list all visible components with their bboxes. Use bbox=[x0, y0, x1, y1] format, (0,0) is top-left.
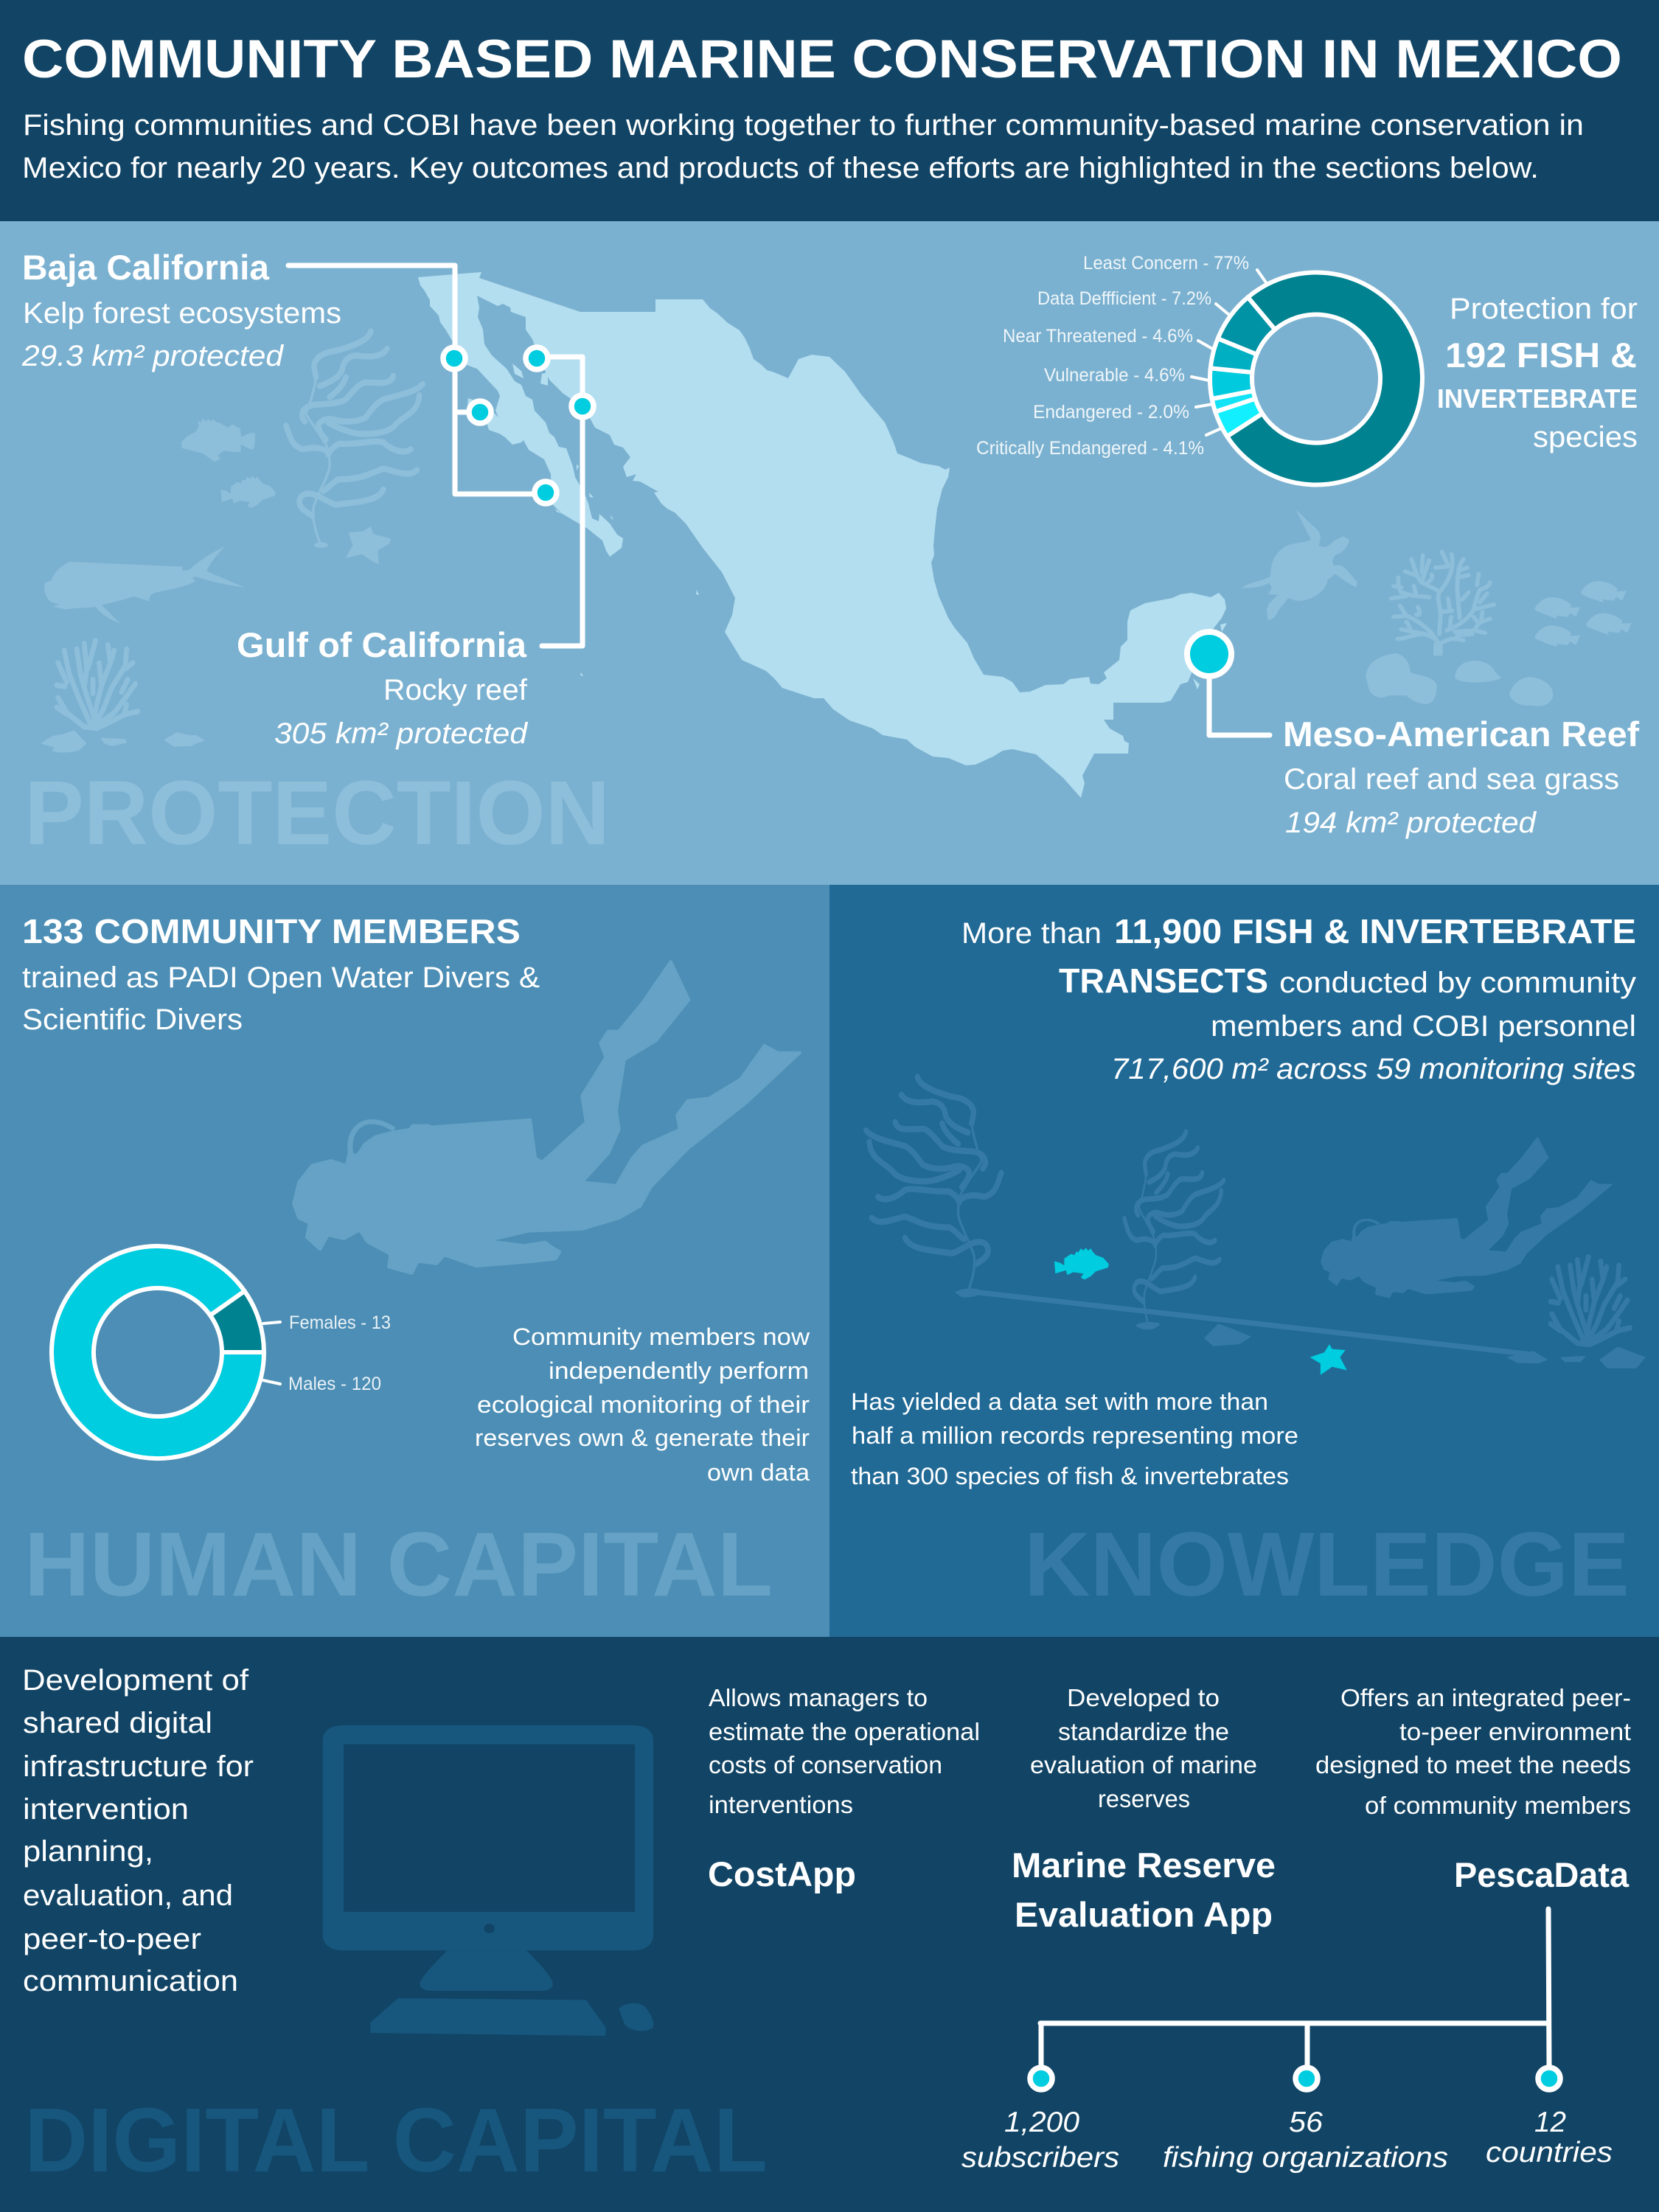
app: CostApp: Allows managers to bbox=[709, 1684, 928, 1711]
panel: digital capital bbox=[0, 1637, 1659, 2212]
app: CostApp bbox=[708, 1684, 980, 1893]
Baja California label: 29.3 km² protected bbox=[21, 340, 285, 372]
Meso-American Reef label: 194 km² protected bbox=[1285, 807, 1537, 839]
icon: coral bbox=[1551, 1257, 1630, 1345]
heading: transects: members and COBI personnel bbox=[1211, 1010, 1636, 1043]
Meso-American Reef label: Coral reef and sea grass bbox=[1284, 763, 1619, 796]
heading: transects bbox=[961, 912, 1636, 1085]
text: digital infrastructure: communication bbox=[23, 1965, 238, 1997]
text: community members monitoring: reserves own & generate their bbox=[475, 1425, 810, 1451]
connector: Gulf of California sites bbox=[526, 347, 594, 646]
icon: coral right bbox=[1391, 552, 1494, 655]
app: Marine Reserve Evaluation App: standardize the bbox=[1058, 1718, 1229, 1745]
heading: transects: 11,900 FISH & INVERTEBRATE bbox=[1114, 912, 1636, 950]
stat: countries: countries bbox=[1486, 2137, 1613, 2168]
panel: header bbox=[0, 0, 1659, 221]
donut chart: gender of divers: Males - 120 bbox=[288, 1374, 381, 1394]
protection for species text bbox=[1437, 293, 1638, 453]
text: data set yield: half a million records representing more bbox=[852, 1422, 1298, 1449]
app: Marine Reserve Evaluation App: Marine Reserve bbox=[1012, 1846, 1276, 1885]
text: data set yield: than 300 species of fish & invertebrates bbox=[851, 1463, 1289, 1489]
illustration: kelp bbox=[286, 331, 422, 542]
heading: transects: More than bbox=[961, 917, 1102, 950]
text: data set yield: Has yielded a data set with more than bbox=[851, 1388, 1268, 1415]
icon: sea turtle bbox=[1241, 510, 1357, 620]
title: COMMUNITY BASED MARINE CONSERVATION IN MEXICO bbox=[22, 29, 1622, 89]
donut chart: species conservation status: Least Concern - 77% bbox=[1083, 253, 1249, 274]
stat: fishing organizations: fishing organizations bbox=[1163, 2142, 1448, 2174]
stat: fishing organizations bbox=[1163, 2107, 1448, 2174]
Gulf of California label bbox=[237, 625, 529, 750]
connector: Baja California sites bbox=[288, 265, 557, 504]
app: CostApp: interventions bbox=[709, 1791, 853, 1818]
icon: kelp left bbox=[866, 1077, 1001, 1291]
connector: Meso-American Reef bbox=[1187, 632, 1270, 735]
text: community members monitoring bbox=[475, 1324, 810, 1486]
icon: cyan fish bbox=[1054, 1248, 1109, 1279]
donut chart: gender of divers bbox=[52, 1246, 391, 1458]
app: PescaData: of community members bbox=[1365, 1792, 1631, 1819]
icon: starfish bbox=[345, 526, 391, 564]
Gulf of California label: 305 km² protected bbox=[274, 717, 529, 750]
Gulf of California label: Gulf of California bbox=[237, 625, 527, 664]
app: Marine Reserve Evaluation App: reserves bbox=[1098, 1785, 1190, 1812]
donut chart: species conservation status bbox=[976, 253, 1422, 484]
app: CostApp: estimate the operational bbox=[709, 1718, 980, 1745]
donut chart: species conservation status: Endangered - 2.0% bbox=[1033, 402, 1189, 422]
text: community members monitoring: ecological monitoring of their bbox=[477, 1391, 810, 1418]
heading: DIGITAL CAPITAL: DIGITAL CAPITAL bbox=[24, 2090, 768, 2191]
text: digital infrastructure: peer-to-peer bbox=[23, 1923, 201, 1955]
app: PescaData: Offers an integrated peer- bbox=[1340, 1684, 1631, 1711]
Baja California label: Kelp forest ecosystems bbox=[23, 297, 341, 330]
heading: transects: conducted by community bbox=[1279, 967, 1636, 999]
heading: KNOWLEDGE: KNOWLEDGE bbox=[1024, 1514, 1630, 1615]
heading: transects: 717,600 m² across 59 monitoring sites bbox=[1111, 1053, 1636, 1085]
heading: community members: Scientific Divers bbox=[22, 1004, 243, 1036]
text: digital infrastructure bbox=[22, 1664, 254, 1997]
heading: PROTECTION: PROTECTION bbox=[24, 763, 610, 864]
donut chart: species conservation status: Vulnerable - 4.6% bbox=[1044, 365, 1185, 386]
stat: countries bbox=[1486, 2107, 1613, 2168]
panel: protection bbox=[0, 221, 1659, 885]
icon: kelp holdfast bbox=[314, 542, 328, 548]
Meso-American Reef label bbox=[1283, 714, 1639, 839]
heading: community members: trained as PADI Open Water Divers & bbox=[22, 961, 540, 994]
Baja California label: Baja California bbox=[22, 248, 270, 287]
text: digital infrastructure: planning, bbox=[23, 1835, 153, 1868]
Gulf of California label: Rocky reef bbox=[383, 674, 528, 706]
heading: community members bbox=[22, 912, 540, 1036]
app: Marine Reserve Evaluation App: Developed to bbox=[1067, 1684, 1220, 1711]
donut chart: species conservation status: Near Threatened - 4.6% bbox=[1003, 326, 1193, 347]
app: CostApp: costs of conservation bbox=[709, 1751, 942, 1778]
illustration: reef fish and rocks bbox=[1366, 581, 1632, 706]
text: digital infrastructure: intervention bbox=[23, 1793, 189, 1826]
donut chart: gender of divers: Females - 13 bbox=[289, 1312, 391, 1333]
stat: fishing organizations: 56 bbox=[1289, 2107, 1323, 2138]
intro text: Fishing communities and COBI have been working together to further community-based marine conservation in bbox=[23, 109, 1584, 142]
stat: subscribers: 1,200 bbox=[1004, 2107, 1079, 2138]
icon: mahi mahi bbox=[44, 546, 245, 624]
app: PescaData: designed to meet the needs bbox=[1315, 1751, 1631, 1778]
stat: subscribers bbox=[961, 2107, 1119, 2174]
map of Mexico bbox=[418, 272, 1227, 798]
illustration: protection sea life bbox=[41, 418, 391, 753]
text: data set yield bbox=[851, 1388, 1298, 1489]
stat: subscribers: subscribers bbox=[961, 2142, 1119, 2174]
icon: desktop computer bbox=[323, 1725, 653, 2036]
app: Marine Reserve Evaluation App: Evaluation App bbox=[1015, 1895, 1273, 1934]
heading: transects: TRANSECTS bbox=[1059, 961, 1268, 1000]
Baja California label bbox=[21, 248, 341, 372]
text: digital infrastructure: Development of bbox=[22, 1664, 249, 1697]
icon: rockfish small bbox=[220, 476, 276, 508]
icon: coral left bbox=[57, 641, 138, 728]
text: community members monitoring: Community members now bbox=[512, 1324, 810, 1350]
connector: PescaData reach bbox=[1030, 1909, 1560, 2090]
heading: community members: 133 COMMUNITY MEMBERS bbox=[22, 912, 521, 950]
icon: cyan starfish bbox=[1310, 1344, 1347, 1375]
Meso-American Reef label: Meso-American Reef bbox=[1283, 714, 1639, 754]
text: digital infrastructure: evaluation, and bbox=[23, 1879, 233, 1912]
app: PescaData: to-peer environment bbox=[1399, 1718, 1631, 1745]
text: community members monitoring: independently perform bbox=[549, 1357, 809, 1384]
app: PescaData bbox=[1315, 1684, 1631, 1894]
illustration: diver bbox=[293, 961, 800, 1273]
text: community members monitoring: own data bbox=[707, 1459, 810, 1486]
heading: HUMAN CAPITAL: HUMAN CAPITAL bbox=[24, 1514, 773, 1615]
icon: kelp right bbox=[1124, 1132, 1223, 1326]
donut chart: species conservation status: Data Deffficient - 7.2% bbox=[1037, 288, 1211, 309]
app: CostApp: CostApp bbox=[708, 1854, 856, 1893]
donut chart: species conservation status: Critically Endangered - 4.1% bbox=[976, 438, 1204, 459]
protection for species text: 192 FISH & bbox=[1445, 335, 1637, 375]
stat: countries: 12 bbox=[1534, 2107, 1566, 2138]
app: Marine Reserve Evaluation App bbox=[1012, 1684, 1276, 1934]
intro text: Mexico for nearly 20 years. Key outcomes and products of these efforts are highlighted in the sections below. bbox=[22, 152, 1539, 184]
text: digital infrastructure: shared digital bbox=[23, 1707, 212, 1739]
icon: rockfish large bbox=[181, 418, 255, 462]
protection for species text: INVERTEBRATE bbox=[1437, 383, 1638, 414]
app: PescaData: PescaData bbox=[1454, 1855, 1630, 1894]
panel: knowledge bbox=[830, 885, 1659, 1637]
intro text bbox=[22, 109, 1584, 184]
illustration: transect scene bbox=[955, 1138, 1646, 1375]
app: Marine Reserve Evaluation App: evaluation of marine bbox=[1030, 1751, 1257, 1778]
text: digital infrastructure: infrastructure for bbox=[23, 1750, 254, 1783]
protection for species text: species bbox=[1533, 421, 1638, 453]
protection for species text: Protection for bbox=[1450, 293, 1638, 325]
icon: small diver bbox=[1321, 1138, 1611, 1297]
panel: human capital bbox=[0, 885, 830, 1637]
icon: rocks left bbox=[41, 731, 205, 753]
icon: transect line and seabed bbox=[955, 1288, 1646, 1368]
